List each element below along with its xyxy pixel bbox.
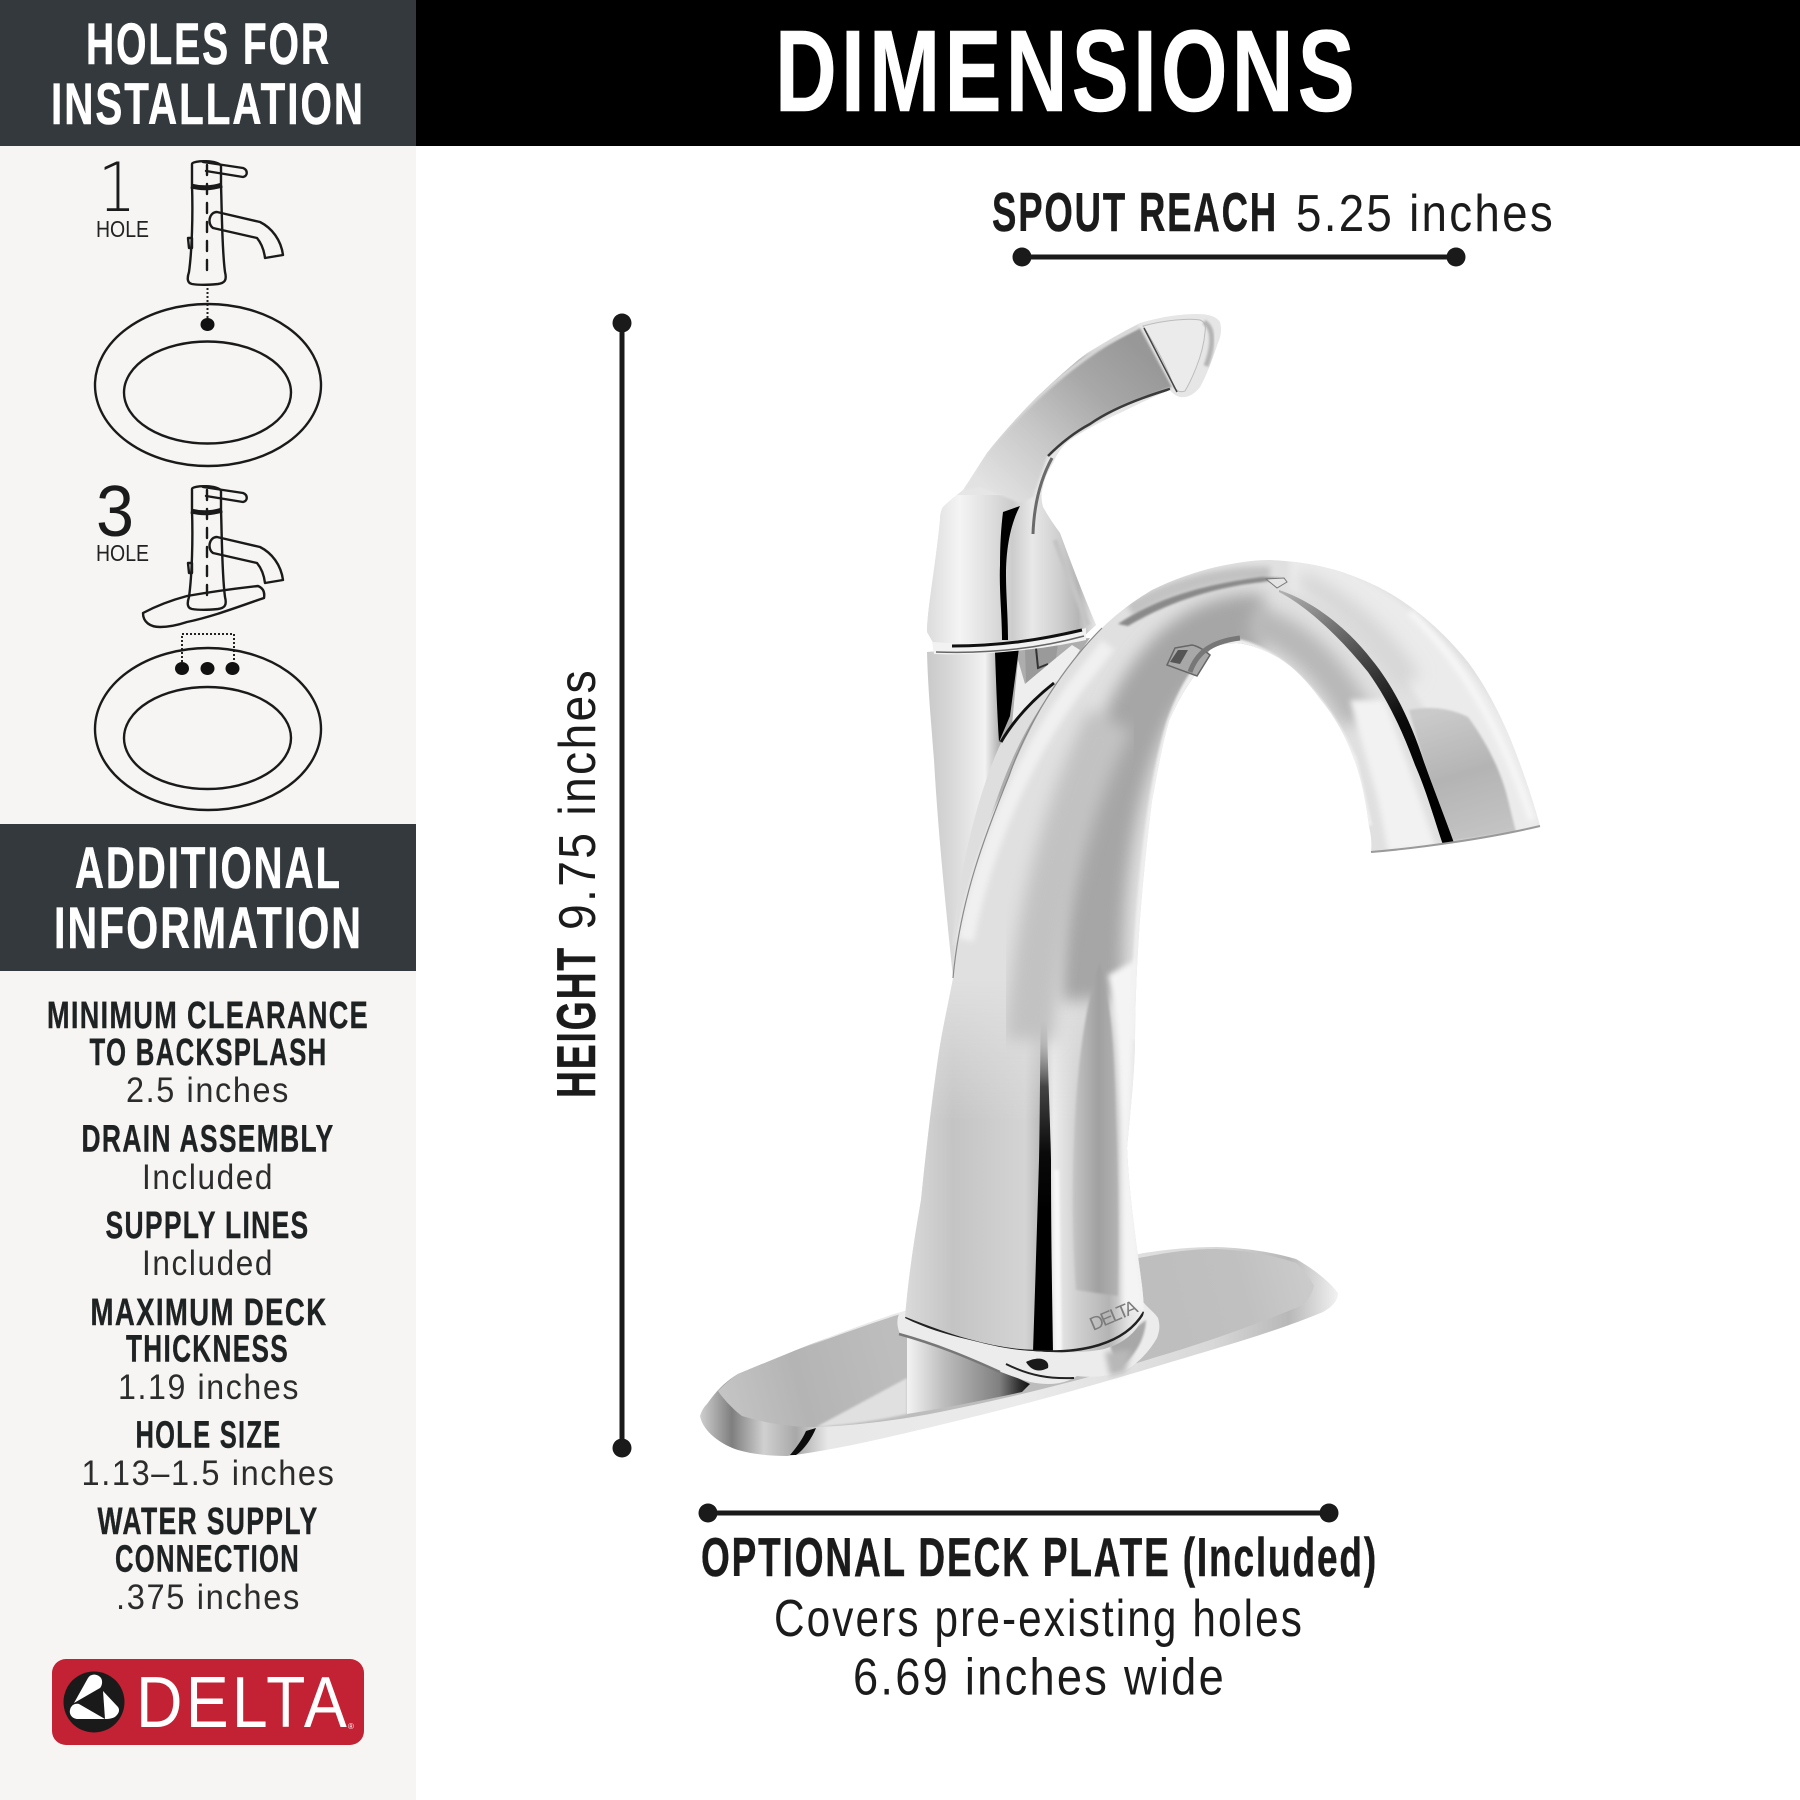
icon: faucet line art <box>188 161 283 285</box>
logo: Delta <box>52 1659 364 1745</box>
dimension: optional deck plate: OPTIONAL DECK PLATE (Included) <box>701 1526 1378 1588</box>
spec: water supply connection: CONNECTION <box>115 1538 300 1580</box>
spec: water supply connection: .375 inches <box>116 1578 301 1617</box>
diverter detail <box>1167 638 1240 676</box>
grey central band <box>1092 625 1262 1000</box>
icon: sink one hole <box>95 304 321 466</box>
right grey face <box>1409 708 1516 842</box>
handle <box>920 314 1221 660</box>
label: 3 hole <box>96 472 149 566</box>
black reflection <box>1033 1000 1053 1352</box>
spout notch <box>1266 578 1287 588</box>
title banner: dimensions <box>416 0 1800 146</box>
heading: additional information: ADDITIONAL <box>75 836 342 901</box>
dimension: optional deck plate: Covers pre-existing holes <box>774 1590 1304 1648</box>
spout top slit <box>1118 577 1282 626</box>
base collar <box>897 1303 1159 1384</box>
rim black slash <box>790 1428 816 1455</box>
spec: maximum deck thickness: 1.19 inches <box>118 1368 300 1407</box>
faucet photo illustration <box>698 314 1570 1706</box>
outer right region <box>1290 555 1545 838</box>
upper left white <box>966 645 1108 940</box>
DELTA engraving: DELTA <box>1087 1297 1141 1336</box>
logo: Delta: DELTA <box>136 1663 350 1743</box>
spec: minimum clearance <box>47 995 369 1110</box>
heading: holes for installation: INSTALLATION <box>51 72 365 137</box>
spec: hole size: 1.13–1.5 inches <box>82 1454 336 1493</box>
label: 1 hole: 1 <box>98 149 136 228</box>
heading: additional information <box>0 824 416 971</box>
icon: deck plate line art <box>143 586 264 627</box>
spout aerator mouth <box>1371 826 1540 852</box>
heading: holes for installation <box>0 0 416 146</box>
tongue reflection <box>1073 962 1119 1296</box>
spec: hole size <box>82 1414 336 1493</box>
front left edge line <box>953 628 1102 978</box>
spec: maximum deck thickness: MAXIMUM DECK <box>90 1292 328 1334</box>
spec: drain assembly: Included <box>142 1158 274 1197</box>
spec: drain assembly <box>82 1118 334 1197</box>
title banner: dimensions: DIMENSIONS <box>775 6 1359 136</box>
plate reflection <box>907 1336 1030 1414</box>
spec: water supply connection: WATER SUPPLY <box>98 1501 318 1543</box>
spec: drain assembly: DRAIN ASSEMBLY <box>82 1118 334 1160</box>
spec: water supply connection <box>98 1501 318 1617</box>
label: 1 hole <box>96 149 149 242</box>
dimension: spout reach <box>992 181 1555 266</box>
spec: supply lines <box>106 1205 310 1283</box>
lower body tone <box>906 1018 1144 1352</box>
heading: holes for installation: HOLES FOR <box>86 12 331 77</box>
spec: supply lines: Included <box>142 1244 274 1283</box>
spec: maximum deck thickness: THICKNESS <box>126 1328 289 1370</box>
handle top edge <box>1007 326 1138 430</box>
icon: faucet line art <box>188 486 283 610</box>
spec: minimum clearance: TO BACKSPLASH <box>90 1032 328 1074</box>
rear body <box>927 638 1090 978</box>
label: 1 hole: HOLE <box>96 216 149 242</box>
spout and faucet body <box>905 560 1540 1352</box>
dotted guide <box>206 288 208 320</box>
text block: additional information specs <box>47 995 369 1617</box>
white column beside tongue <box>1108 960 1144 1310</box>
base edge line <box>905 1312 1144 1352</box>
heading: additional information: INFORMATION <box>54 896 363 961</box>
deck plate <box>700 1247 1338 1456</box>
label: 3 hole: HOLE <box>96 540 149 566</box>
inner edge highlight <box>1133 642 1369 1040</box>
black spout reflection <box>1279 590 1454 845</box>
spec: maximum deck thickness <box>90 1292 328 1407</box>
icon: one hole installation <box>95 149 321 466</box>
handle ring <box>932 628 1086 654</box>
panel: left sidebar <box>0 0 416 1800</box>
dimension: height: HEIGHT <box>545 946 607 1098</box>
dimension: height: 9.75 inches <box>549 668 607 930</box>
dimension: height <box>545 314 632 1458</box>
spec: minimum clearance: 2.5 inches <box>126 1071 290 1110</box>
spec: supply lines: SUPPLY LINES <box>106 1205 310 1247</box>
handle underside detail <box>1048 389 1170 456</box>
dimension: optional deck plate: 6.69 inches wide <box>853 1648 1226 1706</box>
spec: minimum clearance: MINIMUM CLEARANCE <box>47 995 369 1037</box>
handle tip facet <box>1143 319 1205 392</box>
dimension: spout reach: SPOUT REACH <box>992 181 1278 243</box>
plate light wedge <box>816 1378 907 1427</box>
handle arm grey face <box>963 328 1172 503</box>
dimension: spout reach: 5.25 inches <box>1296 185 1555 243</box>
icon: three hole installation <box>95 472 321 810</box>
spec: hole size: HOLE SIZE <box>136 1414 282 1456</box>
icon: sink three holes <box>95 648 321 810</box>
handle black reflection <box>1000 506 1020 640</box>
dimension: optional deck plate <box>698 1504 1378 1706</box>
top of arch <box>1130 574 1270 610</box>
label: 3 hole: 3 <box>96 472 134 552</box>
logo: Delta: ® <box>348 1722 354 1731</box>
dotted guide box <box>182 634 234 662</box>
